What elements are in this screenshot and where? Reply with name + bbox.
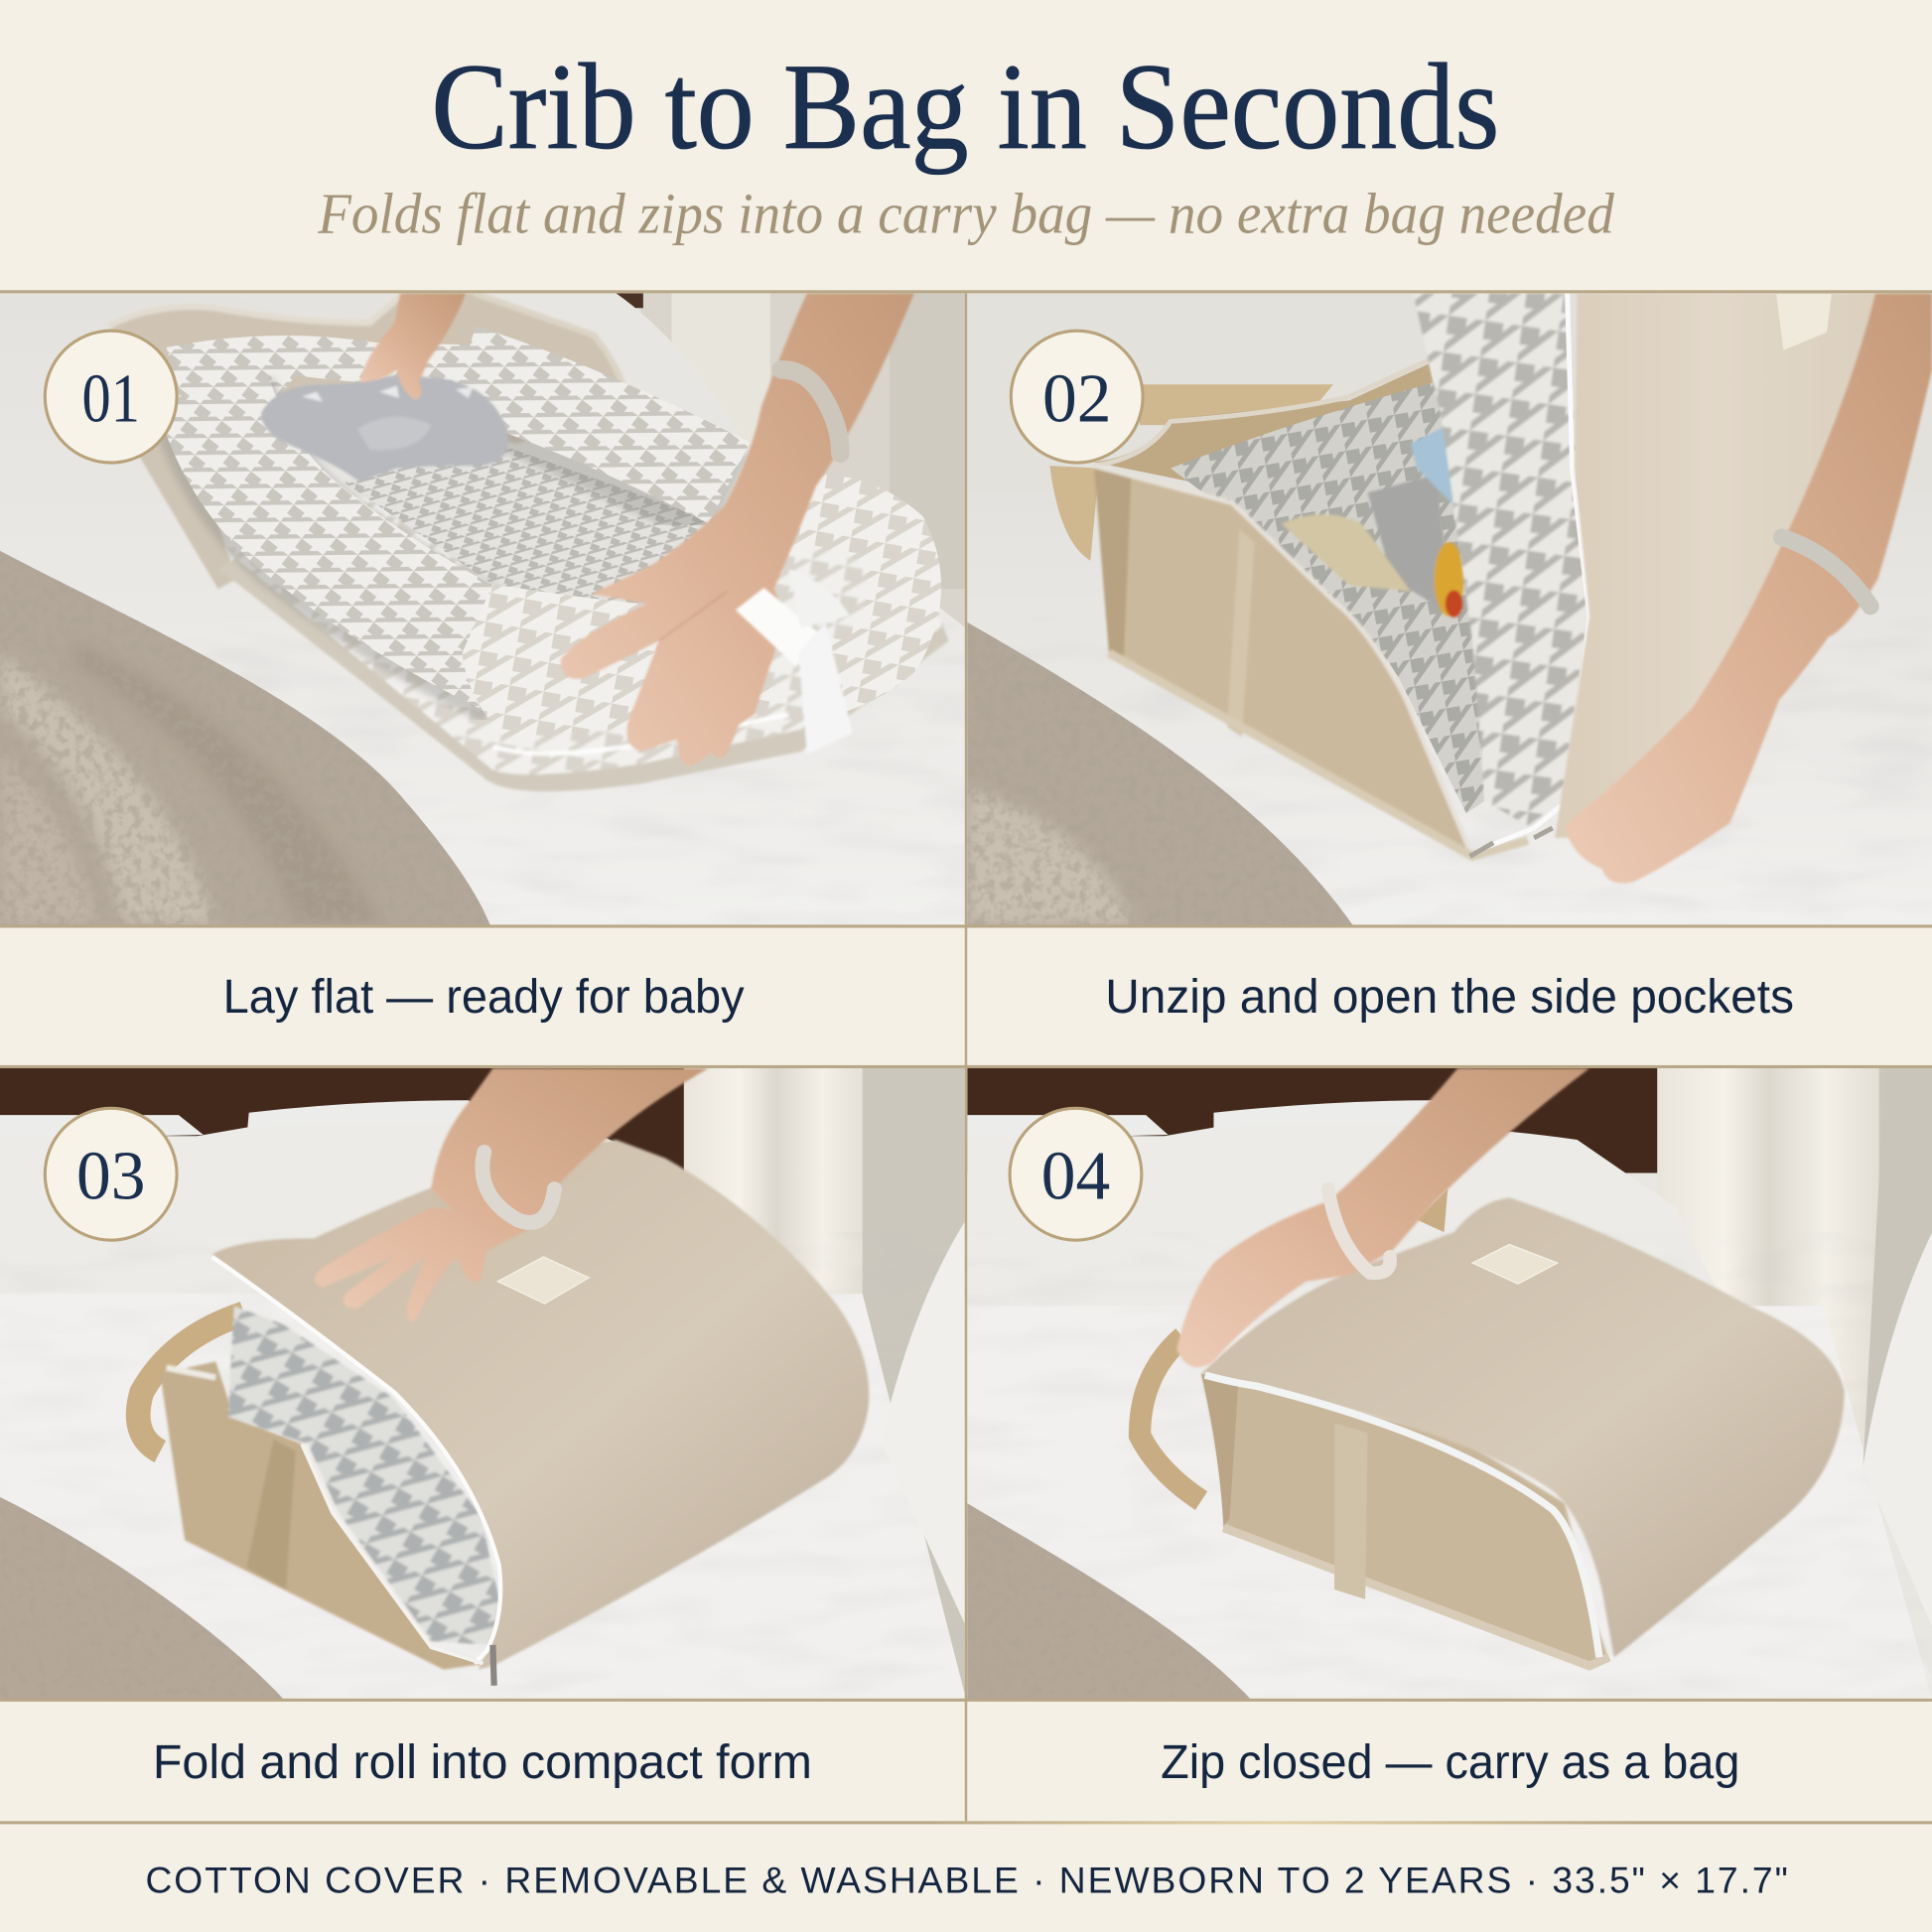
step badge 01: 01 bbox=[82, 360, 140, 437]
outer flap bbox=[1555, 293, 1875, 838]
zipper pull bbox=[1470, 828, 1553, 857]
front corner bbox=[462, 584, 788, 737]
curtain bbox=[684, 1068, 869, 1426]
inside houndstooth bbox=[1171, 382, 1484, 813]
divider lines bbox=[0, 290, 1932, 1824]
panel: step 2 photo bbox=[967, 293, 1932, 925]
houndstooth interior bbox=[228, 1307, 502, 1645]
strap bbox=[1140, 1337, 1201, 1501]
zipper pull bbox=[492, 1645, 494, 1686]
title: Crib to Bag in Seconds bbox=[431, 38, 1499, 175]
subtitle: Folds flat and zips into a carry bag — no extra bag needed bbox=[317, 182, 1615, 246]
step badge 01 bbox=[45, 331, 177, 463]
upper hand bbox=[359, 293, 466, 400]
blanket bbox=[0, 551, 490, 925]
bracelet bbox=[1328, 1189, 1390, 1273]
bed sheet bbox=[197, 608, 965, 925]
sheet wrinkles bbox=[252, 680, 672, 832]
bed bbox=[0, 1122, 966, 1699]
far end of bumper bbox=[758, 511, 904, 684]
bracelet bbox=[483, 1152, 554, 1222]
panel: step 3 photo bbox=[0, 1068, 966, 1699]
label bbox=[1472, 1244, 1558, 1284]
headboard bbox=[967, 1068, 1660, 1173]
zipper bbox=[1478, 293, 1589, 850]
ribbon bbox=[736, 569, 853, 755]
panel: step 4 photo bbox=[967, 1068, 1932, 1699]
back shell of nest bbox=[108, 293, 628, 589]
inner mat bbox=[345, 447, 712, 603]
step badge 03: 03 bbox=[76, 1139, 145, 1215]
dome bbox=[211, 1140, 869, 1670]
headboard bbox=[0, 1068, 688, 1173]
side panel bbox=[1201, 1374, 1238, 1528]
dome bbox=[1201, 1197, 1845, 1657]
strap bbox=[1049, 384, 1333, 561]
zipper bbox=[211, 1257, 500, 1663]
blanket bbox=[967, 622, 1353, 925]
caption: step 2: Unzip and open the side pockets bbox=[1105, 970, 1794, 1024]
bed bbox=[967, 1123, 1932, 1699]
step badge 03 bbox=[45, 1108, 177, 1240]
blanket bbox=[0, 1497, 283, 1699]
headboard sliver bbox=[616, 294, 643, 308]
base trim bbox=[1223, 1528, 1609, 1666]
contents bbox=[1282, 425, 1463, 618]
step badge 02: 02 bbox=[1042, 360, 1111, 437]
hand and arm bbox=[315, 1068, 709, 1321]
caption: step 3: Fold and roll into compact form bbox=[153, 1735, 812, 1789]
bag pocket bbox=[160, 1361, 486, 1670]
top roll bbox=[167, 336, 471, 397]
arm and hand bbox=[1176, 1068, 1589, 1367]
label bbox=[497, 1257, 589, 1304]
front pocket bbox=[1094, 466, 1528, 860]
right pillow bbox=[881, 1220, 966, 1626]
baby pillow bbox=[261, 375, 508, 482]
pocket strap bbox=[1334, 1423, 1368, 1599]
arm and hand bbox=[1565, 293, 1932, 884]
strap bbox=[138, 1313, 244, 1451]
curtain bbox=[641, 294, 965, 627]
caption: step 4: Zip closed — carry as a bag bbox=[1161, 1735, 1739, 1789]
lower white piping bbox=[302, 1445, 483, 1663]
rear bag wall bbox=[1094, 363, 1442, 492]
lower body bbox=[1201, 1374, 1608, 1670]
right roll shadow bbox=[504, 433, 747, 525]
pillow bbox=[612, 294, 671, 404]
right roll bbox=[462, 369, 730, 483]
bracelet bbox=[781, 369, 840, 454]
pillows bbox=[0, 1100, 530, 1140]
step badge 04 bbox=[1010, 1108, 1142, 1240]
pillows bbox=[967, 1100, 1497, 1140]
inner flap houndstooth bbox=[1414, 293, 1587, 826]
lower houndstooth bbox=[1337, 579, 1478, 807]
panel: step 1 photo bbox=[0, 293, 966, 925]
right pillow bbox=[1863, 1232, 1932, 1626]
bottom mattress layer bbox=[219, 492, 949, 791]
main arm and hand bbox=[561, 293, 914, 766]
flap label bbox=[1775, 293, 1832, 351]
step badge 04: 04 bbox=[1041, 1139, 1110, 1215]
bracelet bbox=[1782, 537, 1870, 607]
footer specs: COTTON COVER · REMOVABLE & WASHABLE · NEWBORN TO 2 YEARS · 33.5" × 17.7" bbox=[145, 1859, 1788, 1900]
caption: step 1: Lay flat — ready for baby bbox=[223, 970, 745, 1024]
curtain bbox=[1657, 1068, 1881, 1462]
left roll bbox=[211, 388, 511, 659]
left roll shadow bbox=[211, 394, 511, 665]
zipper bbox=[1205, 1375, 1599, 1657]
blanket bbox=[967, 1503, 1251, 1699]
step badge 02 bbox=[1011, 331, 1143, 463]
bed sheet bbox=[967, 492, 1932, 925]
